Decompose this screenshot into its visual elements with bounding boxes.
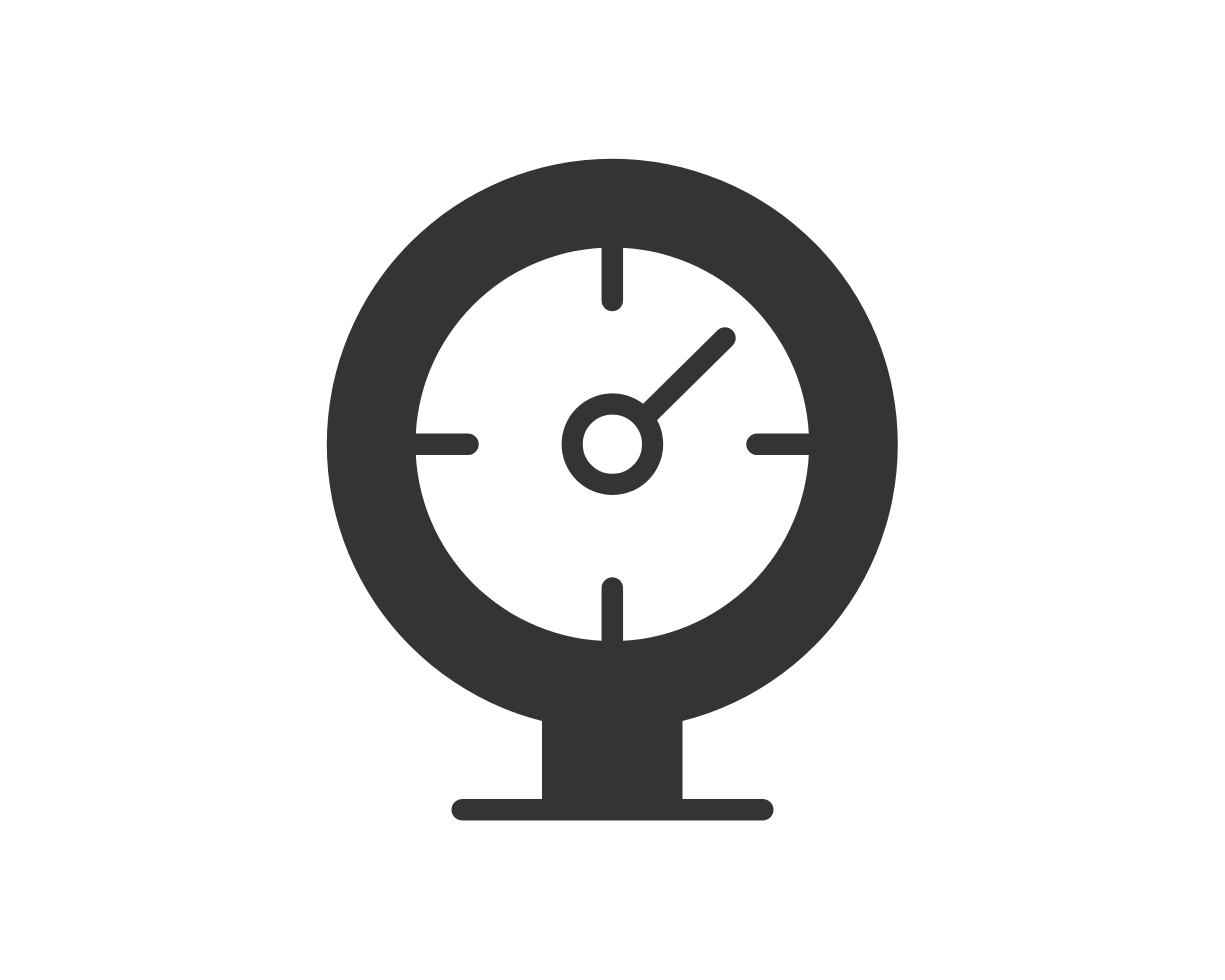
tick marks [408,240,816,648]
gauge stand and base [452,690,774,820]
needle hub [572,404,653,484]
icon: pressure gauge [327,159,898,820]
gauge outer ring [327,159,898,730]
gauge dial face [416,247,809,641]
needle [645,338,725,417]
